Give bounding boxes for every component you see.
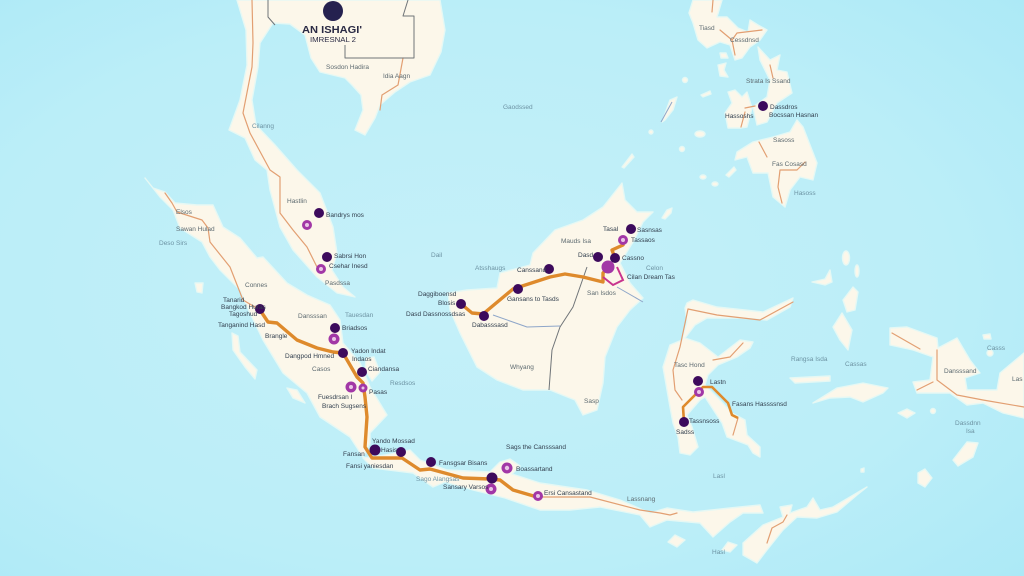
route: east Borneo loop [602,260,623,285]
labels: Philippines [699,25,819,197]
land: eastern islands [790,251,1024,487]
labels: mainland and peninsula: Sabrsi Hon [334,253,367,260]
labels: Borneo: Cilan Dream Tas [627,274,676,281]
labels: Philippines: Strata Is Ssand [746,78,791,85]
labels: Borneo: Tassaos [631,237,656,244]
markers [255,101,768,501]
title: IMRESNAL 2 [310,37,356,44]
labels: Philippines: Hasoss [794,190,816,197]
labels: Borneo: Dail [431,252,443,259]
labels: Borneo: Sasnsas [637,227,663,234]
title: AN ISHAGI' [302,24,362,36]
land: Sumatra [145,178,387,457]
labels: mainland and peninsula: Idia Aagn [383,73,410,80]
labels: Java: Boassartand [516,466,553,473]
land: Borneo islet [662,208,672,219]
labels: Borneo [406,226,676,405]
labels: Sumatra [159,209,416,470]
labels: Sulawesi and east: Casss [987,345,1006,352]
land: Java and Lesser Sunda [363,450,763,537]
labels: Sulawesi and east: Isa [966,428,975,435]
labels: Sumatra: Fansi yaniesdan [346,463,394,470]
labels: Borneo: Whyang [510,364,534,371]
labels: Sumatra: Casos [312,366,331,373]
land: Sumatra offshore islands [195,283,380,403]
borders and rivers [268,0,672,390]
minor roads [165,0,1024,543]
labels: Borneo: Blosis [438,300,456,307]
labels: mainland and peninsula: Cilanng [252,123,274,130]
labels: Sulawesi and east: Tassnsoss [689,418,720,425]
labels: Java: Sags the Cansssand [506,444,566,451]
route: Sumatra to Java [260,310,537,497]
labels: Java: Fansgsar Bisans [439,460,488,467]
labels: Sumatra: Connes [245,282,268,289]
labels: Sulawesi and east: Sadss [676,429,695,436]
logo badge [323,1,343,21]
labels: Sulawesi and east: Dansssand [944,368,977,375]
land: Timor and small southern islands [668,468,867,563]
labels: Sumatra: Tanganind Hasd [218,322,265,329]
labels: Borneo: Dasd Dassnossdsas [406,311,466,318]
labels: Sumatra: Yadon Indat [351,348,386,355]
labels: Philippines: Fas Cosasd [772,161,807,168]
labels: mainland and peninsula: Sosdon Hadira [326,64,369,71]
labels: Borneo: Dabasssasd [472,322,508,329]
labels: Java: Hasl [712,549,726,556]
labels: Borneo: Mauds Isa [561,238,591,245]
labels: Sumatra: Pasas [369,389,388,396]
labels: Sumatra: Elsos [176,209,193,216]
labels: Sulawesi and east: Rangsa Isda [791,356,828,363]
labels: Java: Yando Mossad [372,438,415,445]
land: Sulawesi [663,298,793,457]
labels: Borneo: Cassno [622,255,644,262]
land: Philippines [622,0,817,207]
labels: Sulawesi and east: Las [1012,376,1023,383]
labels: Philippines: Hassoshs [725,113,754,120]
labels: Sumatra: Resdsos [390,380,416,387]
labels: Borneo: Tasal [603,226,619,233]
labels: Sulawesi and east: Fasans Hassssnsd [732,401,787,408]
labels: Java: Lassnang [627,496,656,503]
labels: Sumatra: Indaos [352,356,372,363]
labels: Borneo: Atsshaugs [475,265,506,272]
labels: Sulawesi and east [674,345,1023,436]
labels: Borneo: Dasd [578,252,594,259]
labels: Borneo: Canssand [517,267,547,274]
labels: Java: Hasis [381,447,398,454]
labels: Sumatra: Dangpod Hmned [285,353,335,360]
labels: Sulawesi and east: Dassdnn [955,420,981,427]
labels: Sulawesi and east: Cassas [845,361,867,368]
labels: Philippines: Bocssan Hasnan [769,112,819,119]
labels: Borneo: Celon [646,265,663,272]
labels: Sumatra: Brach Sugsens [322,403,367,410]
labels: Borneo: Daggiboensd [418,291,457,298]
labels: Sumatra: Tauesdan [345,312,374,319]
labels: mainland and peninsula: Hastlin [287,198,307,205]
route: Borneo [460,245,623,314]
labels: mainland and peninsula: Csehar Inesd [329,263,368,270]
labels: Sumatra: Ciandansa [368,366,399,373]
labels: Sulawesi and east: Tasc Hond [674,362,705,369]
labels: Borneo: Gansans to Tasds [507,296,560,303]
labels: Java: Lasl [713,473,725,480]
labels: mainland and peninsula: Bandrys mos [326,212,365,219]
labels: mainland and peninsula [252,64,533,287]
labels: Java: Sansary Varsos [443,484,489,491]
labels: Sumatra: Sawan Hulad [176,226,215,233]
labels: Philippines: Cessdnsd [730,37,759,44]
labels: Borneo: Sasp [584,398,599,405]
labels: Sumatra: Tanarid [223,297,245,304]
labels: Sumatra: Tagoshud [229,311,258,318]
labels: Sumatra: Fuesdrsan I [318,394,353,401]
labels: Sumatra: Briadsos [342,325,368,332]
route: Sulawesi [683,387,738,422]
labels: Java: Sago Alangsas [416,476,460,483]
labels: Sumatra: Brangle [265,333,288,340]
labels: mainland and peninsula: Pasdssa [325,280,350,287]
land: mainland and peninsula [229,0,445,297]
labels: mainland and peninsula: Gaodssed [503,104,533,111]
labels: Java [372,438,726,556]
labels: Philippines: Dassdros [770,104,798,111]
labels: Sumatra: Dansssan [298,313,327,320]
labels: Sumatra: Deso Sirs [159,240,188,247]
labels: Java: Ersi Cansastand [544,490,592,497]
labels: Sulawesi and east: Lastn [710,379,726,386]
labels: Philippines: Sasoss [773,137,795,144]
labels: Sumatra: Fansan [343,451,365,458]
title [302,24,362,44]
labels: Philippines: Tiasd [699,25,715,32]
labels: Borneo: San Isdos [587,290,617,297]
labels: Sumatra: Bangkod Huras [221,304,267,311]
land: Borneo [448,183,653,415]
